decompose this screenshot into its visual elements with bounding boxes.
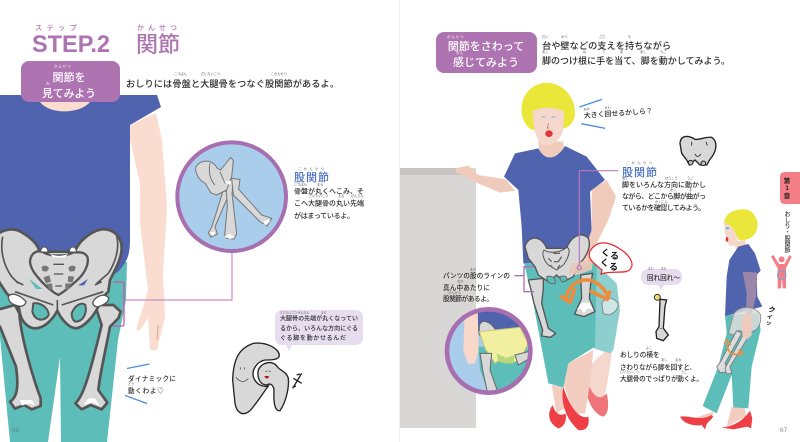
- right tag: 関節をさわって感じてみよう: [436, 32, 537, 73]
- callout: ダイナミックに: どう: [128, 381, 134, 386]
- caption: おしりの横を: 大腿骨のでっぱりが動くよ。: [620, 374, 703, 383]
- speech bubble: くるくる: る: [609, 262, 618, 272]
- sacral foramina: [42, 266, 76, 290]
- pelvis side view: [196, 157, 233, 195]
- callout: ダイナミックに: ダイナミックに: [128, 374, 176, 383]
- inset overlap highlight: [497, 353, 515, 363]
- left femur: [0, 305, 41, 409]
- small pelvis character: [680, 136, 716, 166]
- side tab: 第1章: [780, 172, 800, 204]
- right instructions: も: [628, 34, 631, 39]
- right instructions: 台や壁などの支えを持ちながら: [542, 40, 671, 51]
- right tag: 関節をさわって感じてみよう: かんせつ: [447, 34, 465, 39]
- label: 股関節 explanation: せんたん: [351, 193, 365, 198]
- callout: ダイナミックに: [125, 364, 176, 404]
- caption: パンツの股のライン: なか: [457, 278, 464, 284]
- pointer dot: [577, 266, 581, 270]
- label: 股関節 explanation: まる: [317, 182, 323, 186]
- purple tag: 関節を見てみよう: み: [46, 80, 50, 86]
- femur to front: [225, 180, 237, 239]
- arm: [130, 113, 167, 350]
- speech bubble: くるくる: く: [601, 248, 610, 258]
- pointer line top: [579, 169, 618, 172]
- inset wrist and hand: [463, 307, 479, 364]
- inset femur: [480, 352, 498, 390]
- caption: おしりの横を: さわりながら脚を回すと、: [620, 362, 696, 372]
- caption: パンツの股のライン: こかんせつ: [445, 290, 461, 295]
- label: 股関節 explanation: こへ大腿骨の丸い先端: [294, 198, 364, 208]
- speech bubble: 大腿骨の先端: るから、いろんな方向にぐる: [280, 324, 358, 332]
- right instructions: 脚のつけ根に手を当て、脚を動かしてみよう。: [542, 55, 730, 66]
- face marks: [236, 367, 271, 381]
- sound effect: クイッ: ク: [767, 304, 777, 315]
- label: 股関節 right: こかんせつ: [626, 160, 654, 165]
- teal wedge left: [29, 279, 43, 289]
- neck: [538, 142, 564, 158]
- sacral marks: [548, 253, 562, 268]
- eye: [726, 227, 729, 229]
- inset pants: [478, 346, 528, 390]
- wall / support block: [400, 168, 476, 428]
- femur rotating leg: [575, 273, 595, 317]
- inner pelvis lines: [209, 163, 225, 185]
- caption: パンツの股のライン: [443, 266, 510, 303]
- inset circle: hip skeleton: [177, 142, 286, 251]
- caption: 大きく回せるかしら: まわ: [604, 105, 611, 110]
- right femur: [75, 305, 121, 409]
- sacral lines: [53, 264, 64, 286]
- ball: [258, 363, 288, 411]
- caption: おしりの横を: あし: [661, 357, 667, 362]
- face: [724, 223, 738, 247]
- back leg pants: [588, 260, 620, 353]
- right instructions: かべ: [561, 34, 567, 39]
- front pants: [523, 243, 597, 387]
- shoes: [680, 411, 752, 429]
- speech bubble: 回れ回れ: まわ: [648, 266, 654, 270]
- title latin part: STEP.2: [32, 31, 110, 58]
- condyle white: [577, 303, 593, 313]
- sound effect: クイッ: イ: [766, 313, 773, 322]
- speech bubble: くるくる: る: [610, 251, 619, 261]
- main woman skeleton and arrows: [514, 171, 618, 337]
- caption: おしりの横を: よこ: [646, 345, 652, 350]
- caption: おしりの横を: うご: [681, 369, 688, 374]
- caption: パンツの股のライン: パンツの股のラインの: [443, 272, 510, 280]
- mouth: [545, 130, 553, 137]
- femur character: [654, 294, 668, 341]
- inset shirt: [478, 312, 524, 334]
- label: 股関節 right: [622, 160, 706, 212]
- label: 股関節 explanation: こつばん: [294, 182, 308, 186]
- obturator holes: [32, 303, 86, 322]
- label: 股関節 right: あし: [670, 187, 676, 192]
- femurs: [0, 305, 121, 409]
- femur one: [717, 331, 742, 373]
- ankles: [693, 407, 746, 427]
- label: 股関節 right: 脚をいろんな方向に動かし: [622, 180, 706, 189]
- mouth: [264, 376, 269, 378]
- shirt: [725, 244, 762, 316]
- pelvis: [525, 235, 589, 282]
- main woman figure: [455, 83, 620, 430]
- left arm on wall: [455, 166, 515, 193]
- label: 股関節 explanation: こかんせつ: [298, 166, 326, 171]
- back leg skin: [585, 343, 613, 403]
- pelvis: [0, 229, 122, 328]
- blue shirt: [0, 95, 161, 282]
- label: 股関節 right: ほうこう: [665, 176, 678, 180]
- title: STEP.2 関節: [32, 24, 181, 58]
- nose: [547, 123, 549, 128]
- label: 股関節 right: かくにん: [655, 199, 669, 204]
- right instructions: あし: [542, 49, 548, 54]
- pelvis holes: [547, 276, 567, 284]
- label: 股関節 explanation: 股関節: [294, 170, 330, 184]
- face: [533, 108, 564, 146]
- caption: おしりの横を: だいたいこつ: [620, 369, 639, 374]
- label: 股関節 right: ながら、どこから脚が曲がっ: [622, 192, 706, 200]
- side view woman figure: [680, 209, 762, 429]
- blue wedge right: [78, 279, 88, 285]
- title kanji: 関節: [136, 32, 180, 57]
- intro sentence: [126, 71, 339, 89]
- orange arrows: [724, 340, 743, 356]
- right instructions: て: [602, 50, 605, 54]
- intro sentence: だいたいこつ: [201, 71, 220, 76]
- right tag: 関節をさわって感じてみよう: 感じてみよう: [453, 55, 519, 69]
- speech bubble: 回れ回れ: 回れ回れ〜: [647, 274, 680, 282]
- speech bubble: くるくる: [589, 243, 632, 274]
- hand: [741, 313, 752, 339]
- label: 股関節 right: うご: [687, 176, 694, 180]
- inset white right of pelvis: [528, 346, 529, 350]
- back shoe: [585, 373, 608, 417]
- right instructions: ささ: [599, 34, 605, 39]
- caption: 大きく回せるかしら: 大きく回せるかしら？: [584, 106, 653, 120]
- motion lines: [579, 99, 605, 128]
- side tab: 第1章: 章: [784, 191, 791, 200]
- callout: ダイナミックに: 動くわよ♡: [128, 386, 164, 395]
- caption: おしりの横を: [620, 345, 703, 383]
- arm crease: [157, 325, 158, 340]
- speech bubble: 大腿骨の先端: 大腿骨の先端が丸くなってい: [280, 314, 358, 322]
- femur two: [725, 333, 748, 374]
- label: 股関節 explanation: だいたいこつ: [309, 193, 328, 198]
- label: 股関節 right: 股関節: [622, 165, 658, 179]
- bracket: [514, 267, 534, 292]
- purple tag: 関節を見てみよう: [21, 61, 120, 102]
- eyes: [541, 116, 556, 118]
- right arm to hip: [570, 180, 616, 273]
- speech bubble: 回れ回れ: [641, 266, 682, 290]
- pelvis group: [0, 229, 122, 328]
- purple tag: 関節を見てみよう: 関節を: [52, 70, 86, 84]
- arm sleeve: [743, 272, 757, 315]
- label: 股関節 right: ているかを確認してみよう。: [622, 203, 705, 212]
- hip joints white: [8, 294, 109, 307]
- intro sentence: こかんせつ: [271, 71, 287, 76]
- caption: 大きく回せるかしら: おお: [583, 106, 591, 112]
- pants: [703, 313, 761, 413]
- inset ring: [447, 309, 530, 393]
- sacral top white: [49, 253, 68, 257]
- intro sentence: こつばん: [174, 71, 188, 76]
- right tag: 関節をさわって感じてみよう: 関節をさわって: [448, 39, 524, 53]
- right instructions: うご: [660, 49, 667, 54]
- teal pants: [0, 250, 127, 442]
- right instructions: [542, 34, 730, 66]
- neck skin: [40, 102, 90, 111]
- title kanji furigana: かんせつ: [137, 24, 181, 32]
- intro sentence: おしりには骨盤と大腿骨をつなぐ股関節があるよ。: [126, 78, 339, 89]
- right tag: 関節をさわって感じてみよう: かん: [456, 50, 464, 55]
- hand on hip: [568, 260, 593, 275]
- femur forward: [232, 178, 272, 226]
- inset circle: hand on hip: [447, 307, 533, 397]
- page number 67: 67: [780, 427, 788, 434]
- right instructions: あし: [640, 49, 646, 54]
- speech bubble: 大腿骨の先端: ぐる脚を動かせるんだ: [280, 334, 346, 342]
- white bone ends: [210, 181, 270, 239]
- orange rotation arrows: [560, 280, 610, 302]
- right instructions: だい: [542, 34, 548, 39]
- hair: [724, 209, 758, 240]
- speech bubble: 大腿骨の先端: せんたん: [298, 310, 309, 314]
- speech bubble: くるくる: く: [600, 258, 609, 268]
- motion arrows: [293, 373, 302, 388]
- skeleton pelvis: [728, 307, 761, 335]
- caption: パンツの股のライン: また: [470, 266, 476, 272]
- label: 股関節 right: ま: [689, 187, 692, 192]
- speech bubble: 大腿骨の先端: [275, 310, 363, 351]
- neck: [733, 240, 747, 252]
- label: 股関節 explanation: がはまっているよ。: [294, 211, 354, 220]
- right instructions: ね: [583, 49, 587, 54]
- label: 股関節 explanation: 骨盤が丸くへこみ、そ: [294, 186, 364, 196]
- inset right bone: [515, 352, 530, 365]
- right instructions: あ: [620, 49, 623, 54]
- label: 股関節 right: あし: [622, 176, 628, 180]
- sacrum: [543, 247, 569, 270]
- shirt: [504, 146, 605, 263]
- mouth: [726, 237, 728, 242]
- sound effect: クイッ: ッ: [765, 320, 772, 328]
- speech bubble: 大腿骨の先端: まる: [321, 310, 327, 314]
- pointer line vertical: [578, 171, 581, 266]
- caption: おしりの横を: おしりの横を: [620, 350, 660, 359]
- caption: パンツの股のライン: 真ん中あたりに: [443, 283, 490, 292]
- hair: [522, 83, 575, 130]
- caption: おしりの横を: まわ: [675, 357, 681, 362]
- connector line from bracket to circle: [113, 250, 232, 326]
- inset yellow pelvis: [479, 327, 528, 363]
- side tab: 第1章: 第: [784, 176, 791, 185]
- femur left leg: [528, 278, 556, 337]
- ilium contour lines: [2, 236, 118, 311]
- caption: 大きく回せるかしら: [583, 102, 653, 120]
- sacral tabs: [41, 247, 76, 252]
- label: 股関節 explanation: [294, 166, 365, 220]
- title furigana: ステップ: [35, 24, 81, 32]
- side tab: 第1章: 1: [785, 185, 789, 192]
- purple tag: 関節を見てみよう: かんせつ: [54, 64, 72, 68]
- left figure: body with shirt, arm, pants and pelvis skeleton: [0, 95, 167, 442]
- front leg skin: [552, 350, 593, 413]
- page number 66: 66: [12, 427, 20, 434]
- caption: パンツの股のライン: 股関節があるよ。: [443, 294, 493, 303]
- side vertical text: おしり・股関節: おしり・股関節: [783, 210, 790, 254]
- inset skeleton top: [479, 321, 497, 335]
- pink figure icon: [771, 255, 792, 288]
- sacrum: [30, 251, 88, 295]
- speech bubble: 大腿骨の先端: だいたいこつ: [280, 310, 297, 314]
- socket: [233, 343, 279, 414]
- label: 股関節 explanation: まる: [338, 193, 344, 198]
- femur rear: [208, 190, 229, 237]
- speech bubble: 回れ回れ: まわ: [661, 266, 667, 270]
- sound effect: クイッ: [763, 304, 777, 328]
- front shoes: [549, 387, 589, 430]
- femur condyle notches: [20, 398, 100, 406]
- purple tag: 関節を見てみよう: 見てみよう: [42, 87, 96, 100]
- rear femur end: [602, 298, 618, 315]
- joint character: socket and ball: [233, 343, 302, 414]
